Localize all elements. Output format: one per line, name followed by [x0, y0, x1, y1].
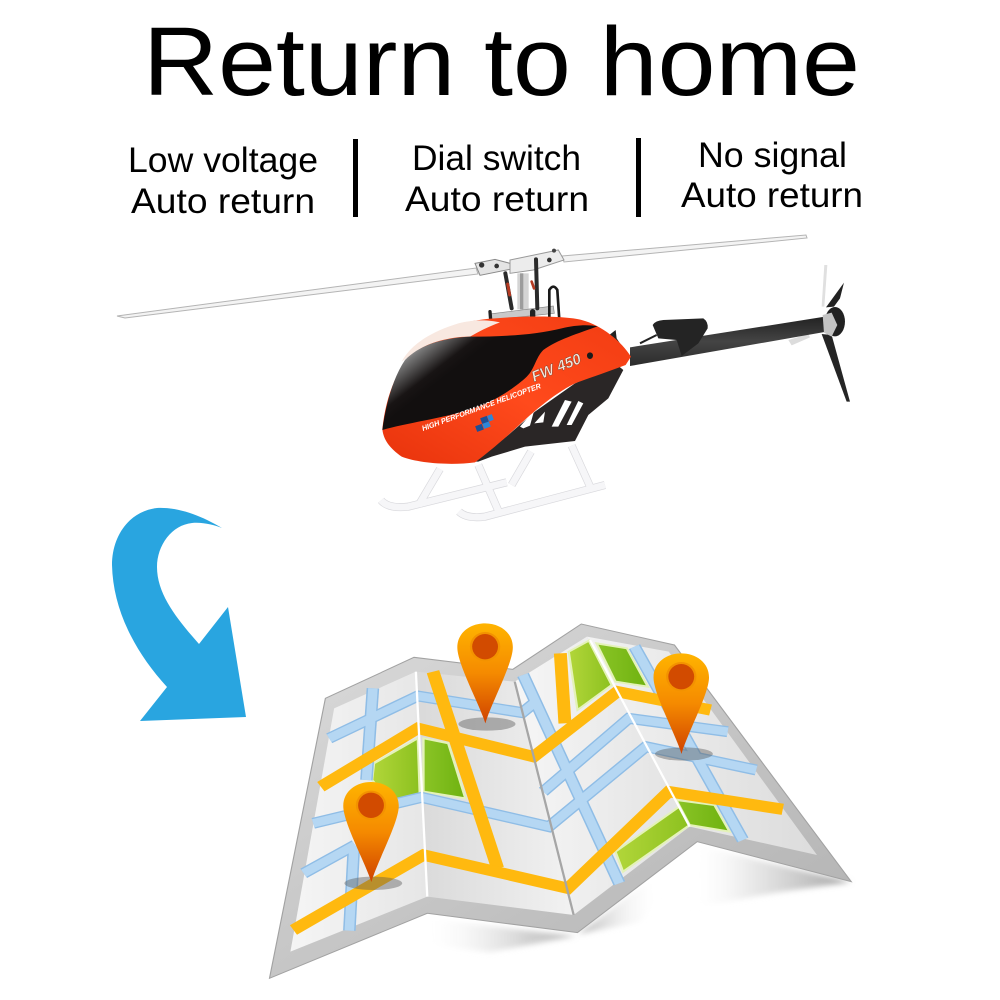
water roads — [304, 647, 756, 931]
pin 3 — [343, 782, 399, 882]
pin 2 — [654, 653, 709, 754]
text block: low voltage: Auto return — [131, 182, 315, 221]
rear rail — [605, 330, 623, 348]
body — [381, 317, 631, 517]
ground shadows — [420, 846, 851, 952]
map sheet panels — [290, 637, 817, 952]
text block: no signal: Auto return — [681, 176, 863, 215]
decal text: HIGH PERFORMANCE HELICOPTER — [421, 381, 543, 433]
map — [270, 623, 851, 978]
text block: no signal: No signal — [698, 136, 847, 175]
text block: low voltage — [128, 141, 318, 221]
chassis frame — [475, 364, 623, 462]
canopy — [382, 317, 631, 464]
yellow roads — [293, 653, 783, 930]
model text: FW 450 — [529, 350, 584, 386]
icon: helicopter — [117, 235, 850, 517]
fold lines — [416, 640, 690, 915]
text block: dial switch: Auto return — [405, 180, 589, 219]
landing skids — [381, 446, 605, 517]
exhaust dot — [587, 352, 593, 359]
blue logo — [475, 414, 494, 432]
text block: no signal — [681, 136, 863, 215]
pin 1 — [457, 623, 513, 723]
text block: low voltage: Low voltage — [128, 141, 318, 180]
text block: dial switch: Dial switch — [412, 139, 581, 178]
canopy window — [382, 325, 598, 430]
tail assembly — [630, 265, 850, 402]
map edge — [270, 624, 851, 978]
pin shadows — [344, 717, 713, 890]
green areas — [372, 641, 730, 872]
divider 1 — [353, 139, 358, 217]
title: Return to home — [143, 7, 860, 116]
main rotor blades — [117, 235, 807, 318]
arrow — [112, 508, 246, 721]
divider 2 — [636, 138, 641, 217]
frame slots — [520, 400, 583, 428]
canopy highlight — [402, 320, 500, 362]
text block: dial switch — [405, 139, 589, 219]
rotor head — [475, 249, 564, 320]
